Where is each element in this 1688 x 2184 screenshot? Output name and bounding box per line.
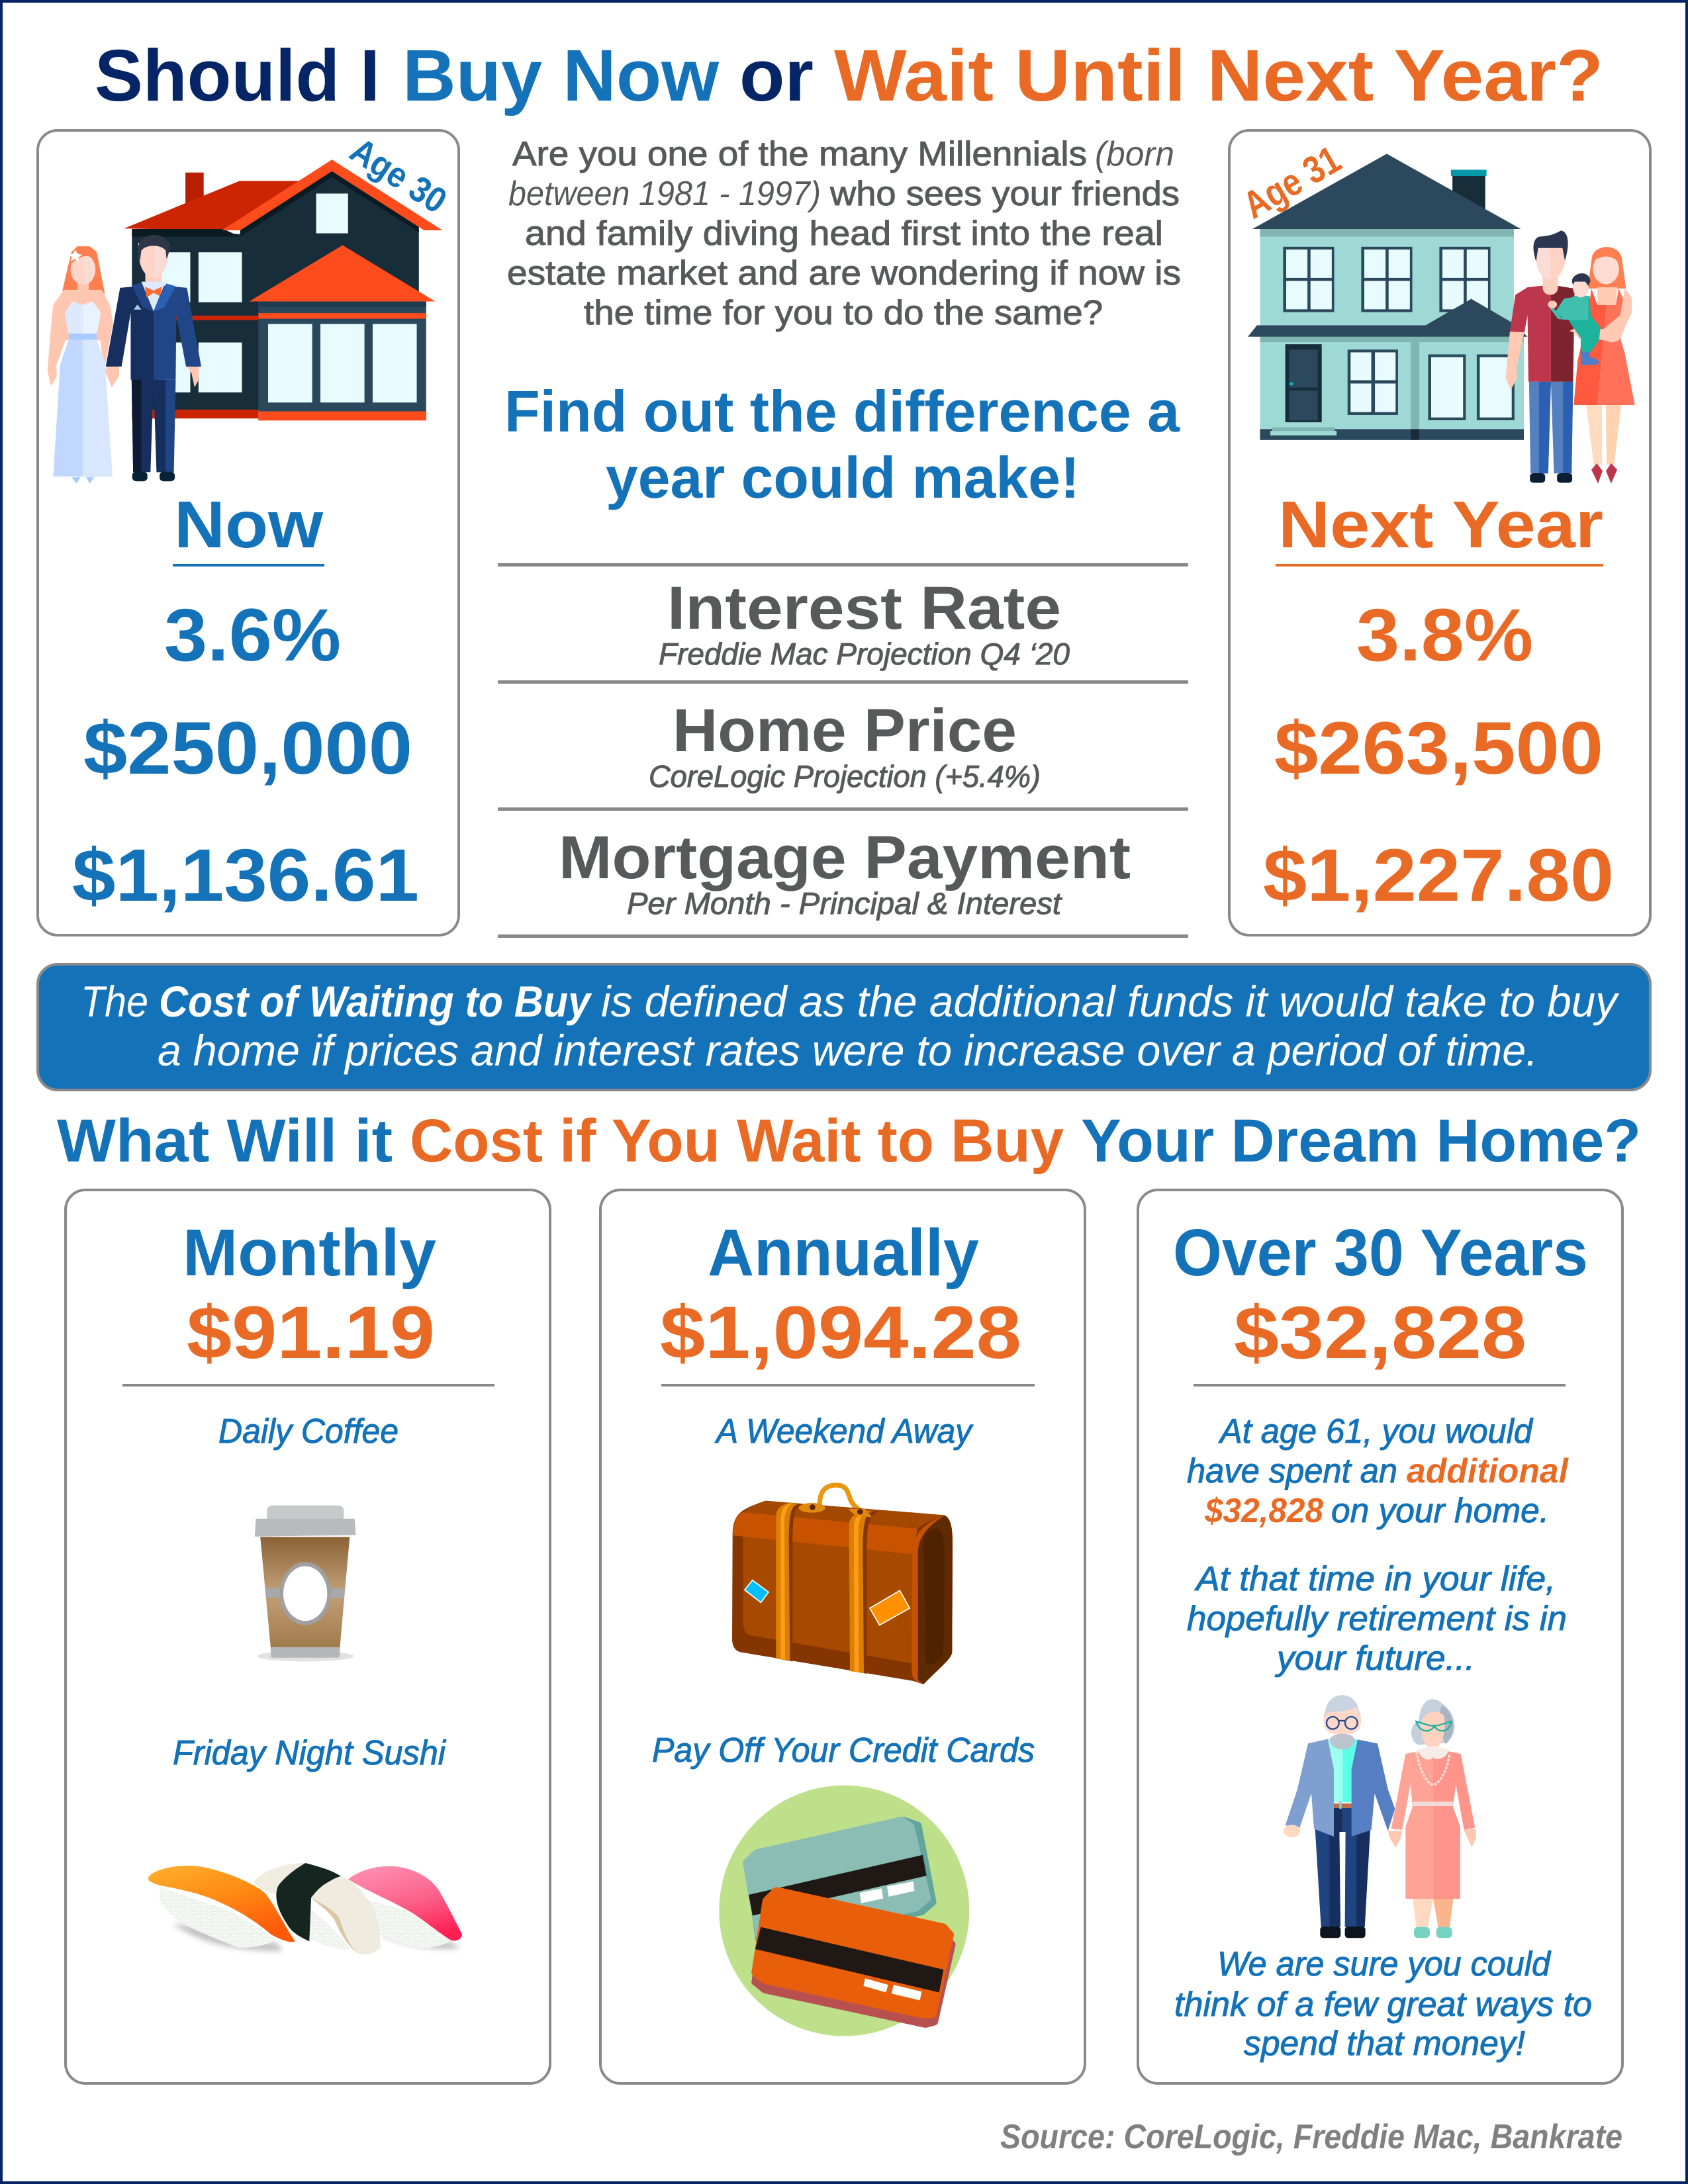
banner: cost of waiting definition: is defined as the additional funds it would take to buy [601,977,1620,1026]
intro text: between 1981 - 1997) [508,175,821,213]
daily coffee label: Daily Coffee [218,1412,399,1451]
retirement note: At that time in your life, [1194,1560,1556,1598]
section heading: Your Dream Home? [1081,1107,1641,1175]
monthly heading: Monthly [183,1216,436,1290]
intro text: who sees your friends [829,175,1180,213]
panel: annually [600,1190,1085,2083]
home price label: CoreLogic Projection (+5.4%) [649,759,1041,794]
home price label: Home Price [673,697,1017,764]
interest rate label: Interest Rate [667,574,1061,642]
credit cards label: Pay Off Your Credit Cards [652,1731,1035,1770]
comparison table labels [498,563,1188,938]
spend it note [1174,1945,1592,2063]
additional spend note: At age 61, you would [1218,1412,1534,1451]
call to action: Find out the difference a [504,379,1180,444]
additional spend note: have spent an [1187,1452,1397,1490]
grandmother [1388,1699,1476,1938]
icon: suitcase [732,1485,953,1684]
mortgage payment label: Mortgage Payment [559,824,1131,891]
intro text: (born [1095,135,1174,173]
spend it note: think of a few great ways to [1174,1985,1592,2024]
interest rate label: Freddie Mac Projection Q4 ‘20 [659,637,1070,671]
title [95,35,1603,116]
call to action [504,379,1180,510]
groom [106,235,201,481]
intro text [507,135,1181,332]
next year home price: $263,500 [1274,707,1603,790]
now mortgage payment: $1,136.61 [72,834,419,917]
now home price: $250,000 [83,707,412,790]
icon: credit cards [719,1786,969,2036]
icon: house with newlyweds [48,159,443,484]
now interest rate: 3.6% [164,594,341,676]
friday night sushi label: Friday Night Sushi [173,1734,446,1772]
intro text: and family diving head first into the real [525,214,1163,253]
call to action: year could make! [606,445,1080,510]
panel: next year [1229,130,1650,935]
weekend away label: A Weekend Away [714,1412,974,1451]
panel: monthly [66,1190,550,2083]
over 30 years heading: Over 30 Years [1173,1216,1588,1290]
intro text: Are you one of the many Millennials [512,135,1087,173]
age 30 label: Age 30 [343,130,453,221]
banner: cost of waiting definition: The [81,977,148,1026]
over 30 years amount: $32,828 [1234,1291,1526,1374]
grandfather [1284,1695,1395,1938]
annually amount: $1,094.28 [660,1291,1021,1374]
retirement note [1187,1560,1567,1678]
annually heading: Annually [708,1216,979,1290]
banner: cost of waiting definition: Cost of Waiting to Buy [159,977,592,1026]
icon: sushi [148,1863,462,1954]
additional spend note: $32,828 [1204,1492,1323,1530]
intro text: the time for you to do the same? [584,294,1103,332]
father [1506,230,1575,483]
section heading: Cost if You Wait to Buy [410,1107,1064,1175]
title: Should I [95,35,380,116]
banner: cost of waiting definition: a home if prices and interest rates were to increase over a period of time. [158,1026,1538,1075]
additional spend note: on your home. [1331,1492,1549,1530]
spend it note: spend that money! [1244,2025,1525,2063]
panel: over 30 years [1138,1190,1622,2083]
next year mortgage payment: $1,227.80 [1263,834,1614,917]
interest rate label [659,574,1070,671]
mortgage payment label: Per Month - Principal & Interest [627,886,1062,921]
section heading: What Will it [57,1107,393,1175]
spend it note: We are sure you could [1217,1945,1552,1983]
retirement note: hopefully retirement is in [1187,1600,1567,1638]
age 31 label: Age 31 [1236,138,1348,227]
mortgage payment label [559,824,1131,921]
next year interest rate: 3.8% [1356,594,1533,676]
additional spend note [1187,1412,1570,1530]
title: or [739,35,814,116]
monthly amount: $91.19 [187,1291,435,1374]
icon: house with family [1248,154,1635,484]
title: Buy Now [402,35,719,116]
icon: elderly couple [1284,1695,1476,1938]
bride [48,246,119,484]
now heading: Now [174,488,323,562]
panel: now [38,130,459,935]
source line: Source: CoreLogic, Freddie Mac, Bankrate [1000,2118,1622,2156]
icon: coffee cup [255,1506,355,1662]
additional spend note: additional [1407,1452,1570,1490]
section heading [57,1107,1641,1175]
next year heading: Next Year [1278,488,1603,562]
banner: cost of waiting definition [38,964,1650,1090]
title: Wait Until Next Year? [834,35,1603,116]
mother and child [1548,247,1635,484]
home price label [649,697,1041,794]
retirement note: your future... [1275,1639,1475,1678]
intro text: estate market and are wondering if now is [507,254,1181,293]
